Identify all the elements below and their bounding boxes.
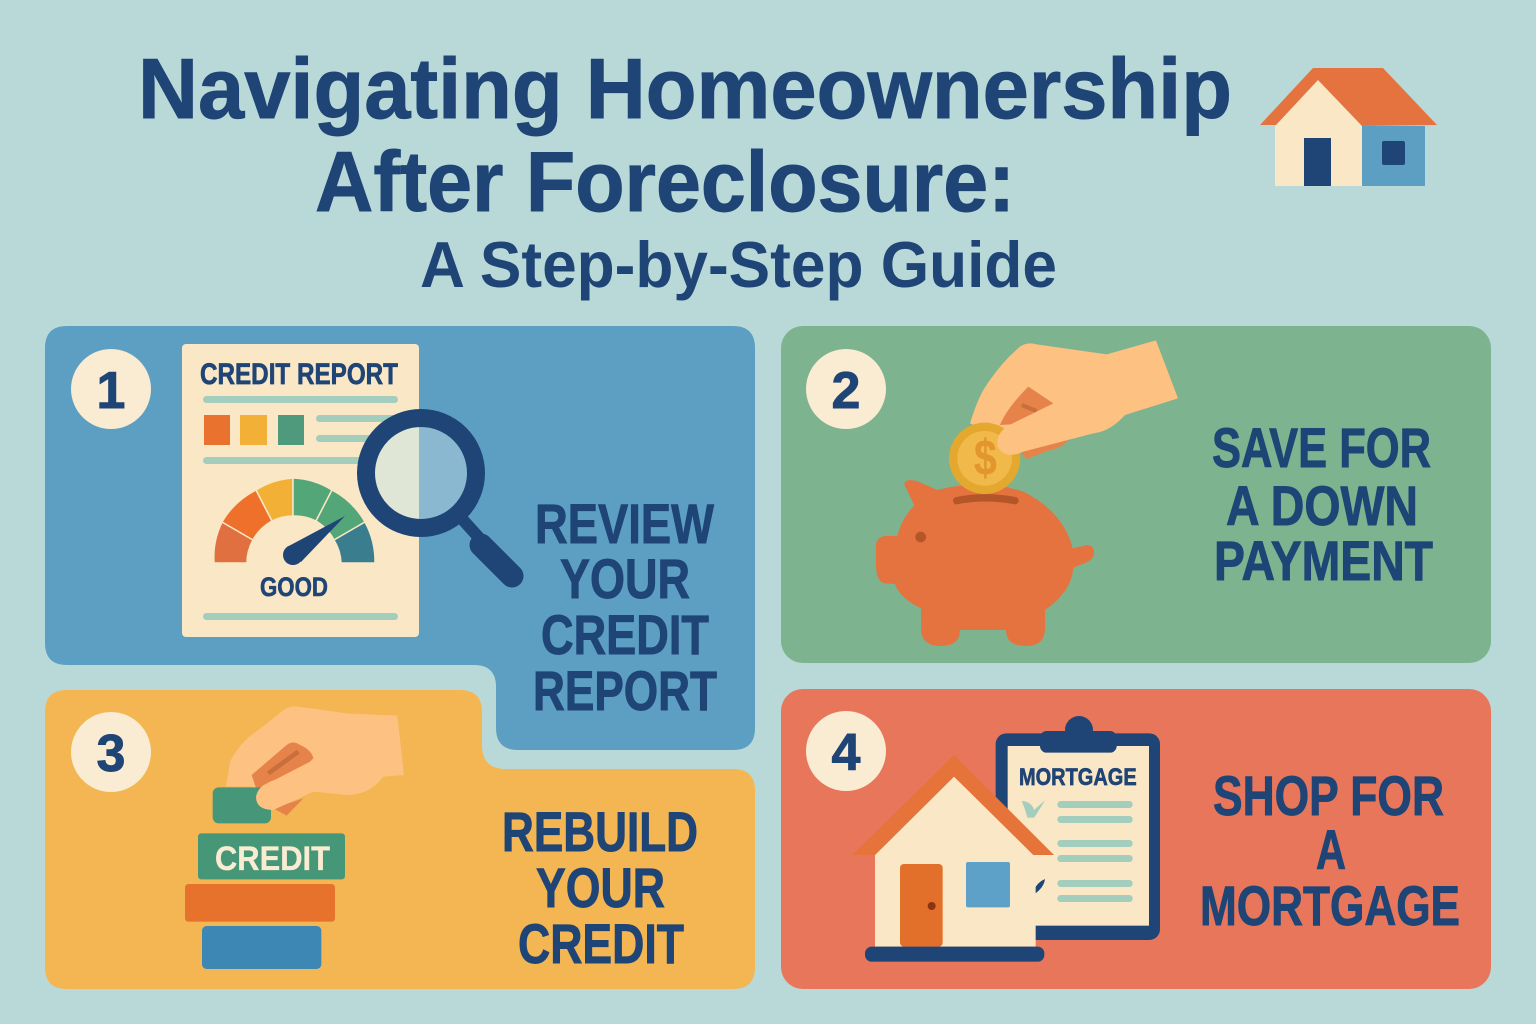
- icon: house: [1260, 68, 1437, 186]
- label: save for a down payment: [1212, 416, 1433, 592]
- label: review your credit report: REPORT: [533, 659, 717, 722]
- number badge 4: [806, 711, 886, 791]
- title: [138, 42, 1232, 301]
- icon: mortgage clipboard: [996, 716, 1160, 940]
- label: review your credit report: REVIEW: [535, 492, 714, 555]
- label: save for a down payment: A DOWN: [1226, 474, 1418, 537]
- label: rebuild your credit: CREDIT: [518, 912, 684, 975]
- icon: magnifying glass: [366, 418, 512, 576]
- credit report document: GOOD: [260, 572, 328, 602]
- number badge 3: [71, 712, 151, 792]
- panel: step 3 rebuild your credit: [45, 690, 755, 989]
- icon: hand stacking credit blocks: CREDIT: [215, 840, 330, 878]
- icon: hand stacking credit blocks: [185, 706, 404, 969]
- label: review your credit report: [533, 492, 717, 722]
- number badge 3: 3: [97, 725, 125, 783]
- label: rebuild your credit: [502, 800, 698, 975]
- label: save for a down payment: PAYMENT: [1214, 529, 1433, 592]
- number badge 2: 2: [832, 362, 860, 420]
- icon: hand with coin: [949, 340, 1178, 494]
- label: shop for a mortgage: [1200, 764, 1460, 937]
- number badge 1: 1: [97, 362, 125, 420]
- number badge 1: [71, 349, 151, 429]
- number badge 2: [806, 349, 886, 429]
- label: shop for a mortgage: A: [1316, 818, 1346, 881]
- label: rebuild your credit: YOUR: [536, 856, 665, 919]
- icon: piggy bank: [876, 480, 1094, 646]
- label: review your credit report: YOUR: [560, 547, 690, 610]
- label: shop for a mortgage: SHOP FOR: [1213, 764, 1444, 827]
- panel: step 1 review credit report: [45, 326, 755, 750]
- icon: house with door: [852, 755, 1054, 962]
- label: shop for a mortgage: MORTGAGE: [1200, 874, 1460, 937]
- panel: step 4 shop for a mortgage: [781, 689, 1491, 989]
- credit report document: [182, 344, 419, 637]
- title: Navigating Homeownership: [138, 42, 1232, 137]
- icon: mortgage clipboard: MORTGAGE: [1019, 764, 1137, 791]
- panel: step 2 save for a down payment: [781, 326, 1491, 663]
- title: A Step-by-Step Guide: [420, 228, 1057, 301]
- icon: hand with coin: $: [974, 430, 997, 486]
- label: rebuild your credit: REBUILD: [502, 800, 698, 863]
- label: save for a down payment: SAVE FOR: [1212, 416, 1431, 479]
- label: review your credit report: CREDIT: [541, 603, 709, 666]
- title: After Foreclosure:: [315, 135, 1015, 230]
- number badge 4: 4: [832, 724, 861, 782]
- credit score gauge: [214, 478, 375, 565]
- credit report document: CREDIT REPORT: [200, 358, 398, 391]
